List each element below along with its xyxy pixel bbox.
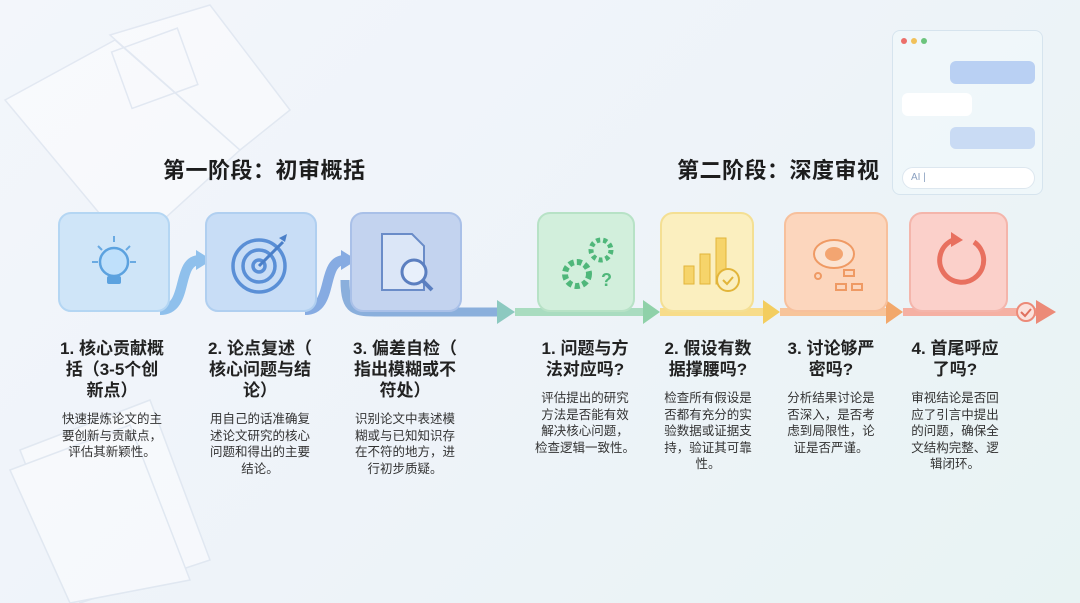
text block: phase1 step2: 论） (243, 381, 277, 400)
text block: phase2 step1: 评估提出的研究 (541, 391, 629, 405)
text block: phase1 step1: 评估其新颖性。 (68, 445, 156, 459)
icon: gears (562, 238, 614, 290)
text block: phase1 step2: 用自己的话准确复 (210, 412, 310, 426)
text block: phase1 step3: 符处） (380, 381, 430, 400)
panel: phase1 step3 icon box (350, 212, 462, 312)
text block: phase1 step3: 3. 偏差自检（ (353, 339, 457, 358)
text block: phase2 step4 (911, 339, 999, 471)
decoration: chat window (892, 30, 1043, 195)
icon: light bulb (92, 236, 136, 284)
text block: phase2 step4: 审视结论是否回 (911, 391, 999, 405)
text block: phase2 step2: 性。 (695, 457, 720, 471)
panel: phase2 step2 icon box (660, 212, 754, 312)
text block: phase2 step4: 的问题，确保全 (911, 424, 999, 438)
text block: phase1 step2: 结论。 (241, 462, 279, 476)
icon: brain thought (813, 239, 863, 291)
text block: phase1 step1: 新点） (86, 381, 138, 400)
text block: phase1 step2 (208, 339, 312, 476)
decoration: chat window: AI | (911, 172, 926, 183)
text block: phase2 step2 (664, 339, 752, 471)
panel: phase2 step1 icon box (537, 212, 635, 312)
text block: phase1 step2: 核心问题与结 (209, 360, 311, 379)
text block: phase2 step4: 了吗? (933, 360, 977, 379)
text block: phase1 step1: 要创新与贡献点， (62, 428, 162, 442)
text block: phase1 step3: 识别论文中表述模 (355, 412, 455, 426)
text block: phase2 step3: 分析结果讨论是 (787, 391, 875, 405)
text block: phase2 step4: 辑闭环。 (930, 457, 980, 471)
icon: document magnifier (381, 233, 434, 292)
text block: phase2 step4: 文结构完整、逻 (911, 440, 999, 454)
text block: phase1 step3 (353, 339, 457, 476)
text block: phase1 step2: 问题和得出的主要 (210, 445, 310, 459)
text block: phase2 step2: 检查所有假设是 (664, 391, 752, 405)
text block: phase1 step2: 2. 论点复述（ (208, 339, 312, 358)
text block: phase1 step3: 在不符的地方，进 (355, 445, 455, 459)
text block: phase1 step3: 行初步质疑。 (367, 462, 442, 476)
text block: phase1 step1 (60, 339, 164, 459)
text block: phase2 step2: 据撑腰吗? (669, 360, 747, 379)
text block: phase2 step2: 2. 假设有数 (665, 339, 751, 358)
text block: phase2 step4: 应了引言中提出 (911, 408, 999, 422)
text block: phase2 step3: 密吗? (809, 360, 853, 379)
text block: phase1 step1: 1. 核心贡献概 (60, 339, 164, 358)
text block: phase1 step1: 快速提炼论文的主 (62, 412, 162, 426)
panel: phase2 step3 icon box (784, 212, 888, 312)
text block: phase2 step3: 虑到局限性，论 (787, 424, 875, 438)
icon: bar chart check (684, 238, 740, 292)
text block: phase2 step2: 否都有充分的实 (664, 408, 752, 422)
icon: target (231, 234, 287, 294)
text block: phase2 step1: 法对应吗? (546, 360, 624, 379)
panel: phase1 step1 icon box (58, 212, 170, 312)
title: phase 2: 第二阶段：深度审视 (677, 158, 880, 183)
text block: phase2 step2: 持，验证其可靠 (664, 440, 752, 454)
text block: phase2 step2: 验数据或证据支 (664, 424, 752, 438)
text block: phase2 step1: 解决核心问题， (541, 424, 629, 438)
text block: phase2 step3: 否深入，是否考 (787, 408, 875, 422)
text block: phase2 step4: 4. 首尾呼应 (912, 339, 998, 358)
text block: phase2 step1: 1. 问题与方 (542, 339, 628, 358)
panel: phase1 step2 icon box (205, 212, 317, 312)
icon: gears: ? (601, 270, 612, 290)
text block: phase2 step1: 检查逻辑一致性。 (535, 440, 635, 454)
decoration: books (4, 4, 291, 603)
text block: phase1 step3: 糊或与已知知识存 (355, 428, 455, 442)
panel: phase2 step4 icon box (909, 212, 1008, 312)
text block: phase2 step1: 方法是否能有效 (541, 408, 629, 422)
text block: phase2 step3 (787, 339, 875, 454)
title: phase 1: 第一阶段：初审概括 (163, 158, 366, 183)
text block: phase1 step2: 述论文研究的核心 (210, 428, 310, 442)
text block: phase1 step1: 括（3-5个创 (66, 360, 158, 379)
text block: phase1 step3: 指出模糊或不 (354, 360, 456, 379)
text block: phase2 step3: 证是否严谨。 (793, 440, 868, 454)
icon: cycle arrow (937, 232, 986, 285)
text block: phase2 step3: 3. 讨论够严 (788, 339, 874, 358)
text block: phase2 step1 (535, 339, 635, 454)
